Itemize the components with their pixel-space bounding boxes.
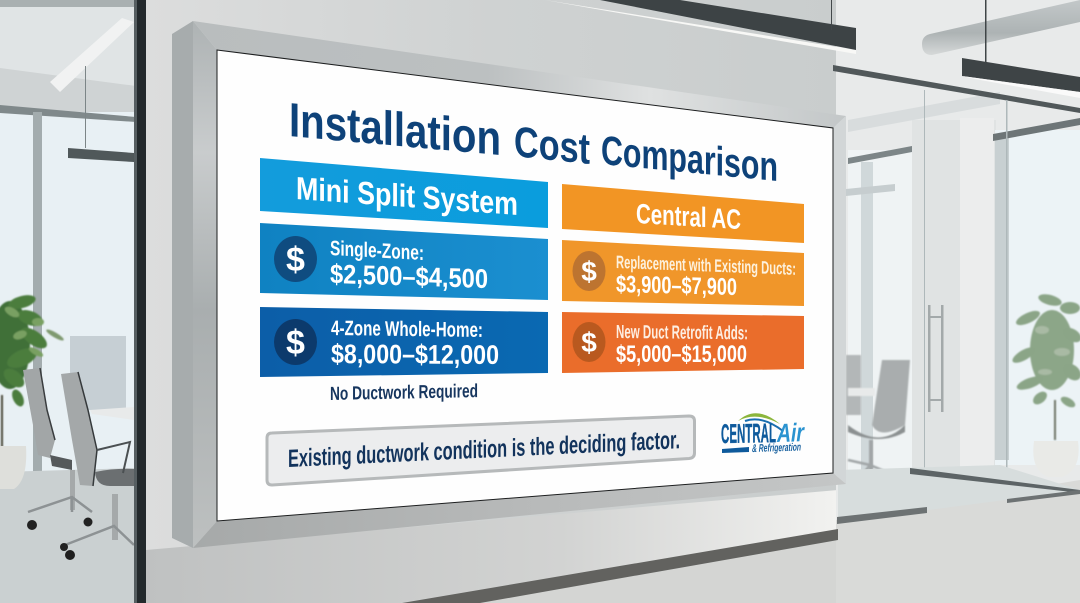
door handle (928, 305, 944, 412)
glass wall top rail (833, 65, 1080, 113)
frame left face (193, 21, 217, 548)
replacement cost row (562, 240, 804, 306)
icon: dollar (274, 319, 317, 365)
floor (836, 480, 1080, 603)
icon: dollar: $ (286, 324, 305, 362)
reflected lamp (846, 184, 895, 196)
callout: deciding factor: Existing ductwork condition is the deciding factor. (288, 426, 680, 473)
title: Comparison (601, 127, 778, 190)
background: right office room (833, 0, 1080, 603)
icon: dollar (572, 251, 606, 291)
frame bottom face (193, 473, 846, 548)
central ac heading: Central AC (636, 198, 741, 235)
table (90, 407, 134, 420)
panel: central ac column (562, 184, 804, 373)
glass door lines (924, 90, 1008, 510)
dark glass door pillar (134, 0, 146, 603)
title: Installation (289, 93, 501, 166)
single-zone cost row (260, 223, 548, 300)
icon: dollar (572, 322, 606, 362)
frame side (172, 21, 193, 548)
plant pot left (0, 446, 26, 489)
single-zone cost row: $2,500–$4,500 (330, 259, 488, 294)
background: left office room (0, 0, 136, 603)
4-zone cost row (260, 307, 548, 377)
mini split heading (260, 158, 548, 228)
note: no ductwork: No Ductwork Required (330, 381, 478, 405)
plant pot right (1033, 441, 1079, 477)
background: wall (146, 0, 838, 603)
skirting strip (402, 529, 838, 603)
screen (217, 50, 833, 521)
icon: dollar: $ (286, 241, 305, 279)
single-zone cost row: Single-Zone: (330, 237, 424, 265)
title: Cost (514, 118, 590, 174)
sign: framed display board (172, 21, 846, 548)
office chairs (23, 368, 134, 560)
panel: mini split column (260, 158, 548, 405)
icon: dollar: $ (581, 256, 597, 287)
4-zone cost row: $8,000–$12,000 (331, 339, 499, 370)
air duct (922, 0, 1080, 55)
plant right (1010, 292, 1080, 440)
mini split heading: Mini Split System (296, 170, 518, 222)
retrofit cost row: $5,000–$15,000 (616, 341, 747, 368)
hanging lamp: foreground right (962, 0, 1080, 98)
title (289, 93, 778, 190)
replacement cost row: Replacement with Existing Ducts: (616, 252, 796, 279)
hanging lamp: foreground centre (545, 0, 856, 54)
logo: central air: & Refrigeration (752, 442, 801, 455)
4-zone cost row: 4-Zone Whole-Home: (331, 317, 483, 342)
logo: central air (721, 413, 805, 455)
replacement cost row: $3,900–$7,900 (616, 271, 737, 301)
icon: dollar: $ (581, 327, 597, 358)
frame top face (193, 21, 846, 128)
logo: central air: Air (776, 417, 805, 448)
ceiling lamp in left room (68, 148, 134, 162)
retrofit cost row: New Duct Retrofit Adds: (616, 322, 748, 344)
frame right face (833, 116, 846, 484)
chair behind glass (846, 355, 911, 485)
logo: central air: CENTRAL (721, 418, 776, 449)
callout: deciding factor (267, 416, 694, 485)
retrofit cost row (562, 312, 804, 373)
icon: dollar (274, 236, 317, 282)
plant left (0, 293, 65, 447)
central ac heading (562, 184, 804, 243)
